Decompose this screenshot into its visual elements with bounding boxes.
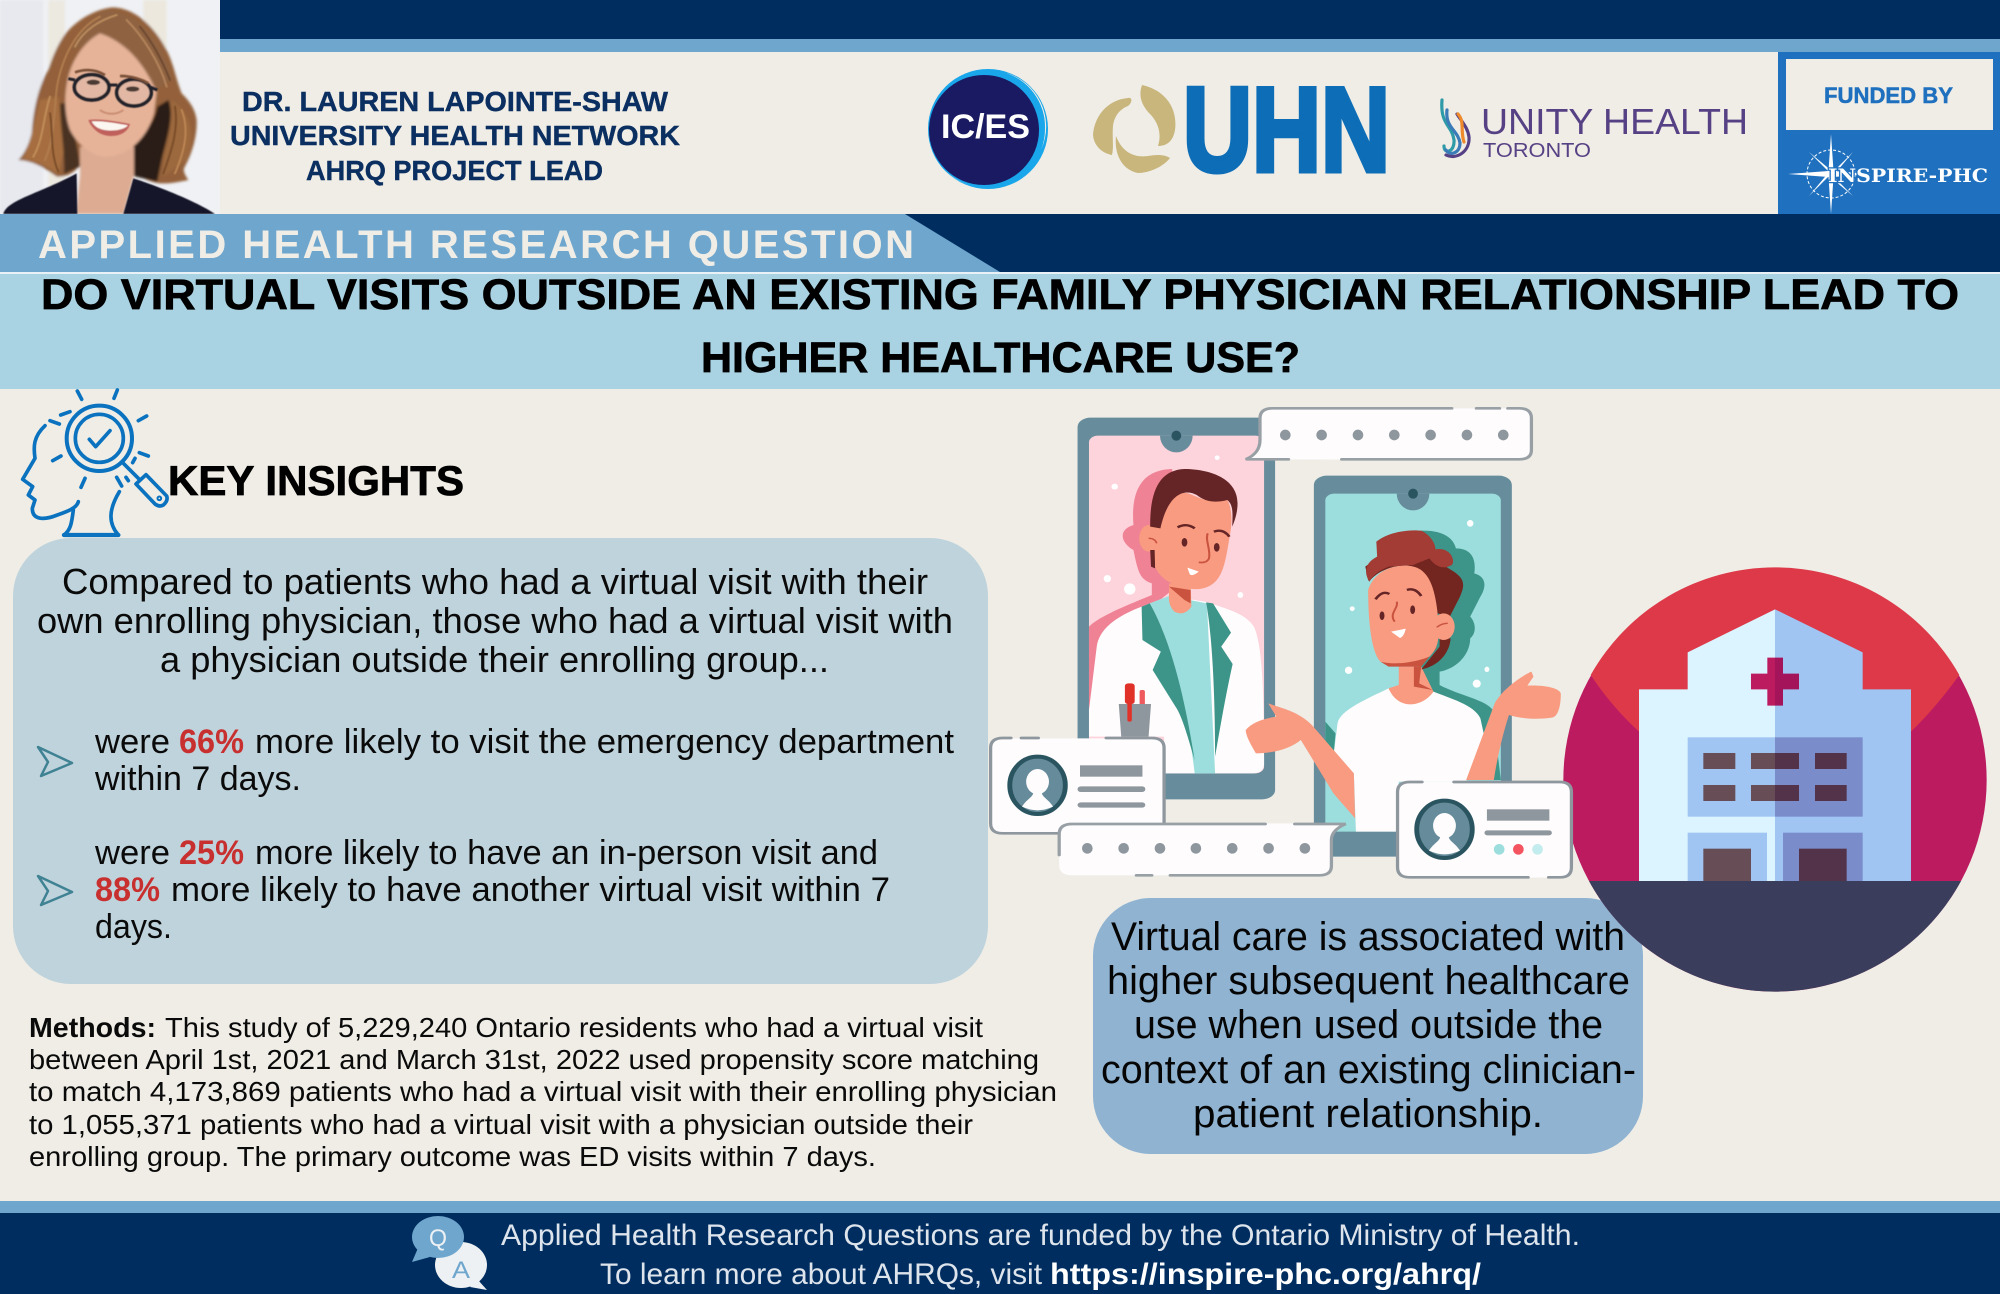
bullet: emergency department: within 7 days. (94, 760, 301, 798)
text block: methods: to match 4,173,869 patients who had a virtual visit with their enrolling physician (29, 1076, 1057, 1107)
panel: funded by INSPIRE-PHC: FUNDED BY (1824, 83, 1953, 108)
bullet: in-person and virtual visits (94, 834, 890, 946)
icon: head with magnifying glass (23, 390, 167, 535)
callout text: virtual care conclusion: higher subsequent healthcare (1107, 959, 1630, 1003)
text block: methods: Methods: (29, 1012, 156, 1043)
id card: patient (1398, 782, 1571, 878)
logo: IC/ES: IC/ES (941, 108, 1030, 146)
bullet: in-person and virtual visits: 25% (179, 834, 244, 872)
bullet: in-person and virtual visits: more likely to have another virtual visit within 7 (171, 871, 890, 909)
logo: UHN: UHN (1183, 63, 1390, 197)
callout text: virtual care conclusion: context of an existing clinician- (1101, 1048, 1636, 1092)
intro paragraph: Compared to patients who had a virtual visit with their (62, 561, 928, 602)
callout text: virtual care conclusion: use when used outside the (1134, 1003, 1603, 1047)
phone: doctor (1078, 418, 1275, 799)
callout text: virtual care conclusion: Virtual care is associated with (1111, 915, 1625, 959)
icon: arrow bullet 1 (38, 747, 72, 776)
intro paragraph: own enrolling physician, those who had a virtual visit with (37, 600, 953, 641)
heading: key insights: KEY INSIGHTS (168, 457, 464, 504)
patient (1246, 530, 1561, 832)
header bands (220, 0, 2000, 52)
footer bands (0, 1201, 2000, 1294)
phone: patient (1314, 476, 1512, 857)
icon: hospital (1563, 567, 1987, 992)
bullet: in-person and virtual visits: more likely to have an in-person visit and (255, 834, 878, 872)
illustration: virtual visit between doctor and patient (991, 408, 1571, 878)
text block: methods: enrolling group. The primary outcome was ED visits within 7 days. (29, 1141, 876, 1172)
bullet: emergency department: were (94, 723, 170, 761)
panel: funded by INSPIRE-PHC: INSPIRE-PHC (1828, 165, 1988, 187)
text block: methods: to 1,055,371 patients who had a virtual visit with a physician outside their (29, 1109, 973, 1140)
title: research question: HIGHER HEALTHCARE USE? (701, 334, 1300, 382)
banner: applied health research question (0, 214, 2000, 272)
presenter name and role (230, 86, 680, 186)
presenter name and role: AHRQ PROJECT LEAD (306, 155, 603, 186)
title: research question: DO VIRTUAL VISITS OUTSIDE AN EXISTING FAMILY PHYSICIAN RELATIONSHIP LEAD TO (41, 271, 1959, 319)
footer text (501, 1219, 1580, 1291)
id card: doctor (991, 738, 1164, 833)
footer text: To learn more about AHRQs, visit (600, 1258, 1043, 1291)
callout text: virtual care conclusion: patient relationship. (1193, 1092, 1543, 1136)
doctor (1089, 469, 1264, 773)
bullet: emergency department: more likely to visit the emergency department (255, 723, 954, 761)
presenter name and role: DR. LAUREN LAPOINTE-SHAW (242, 86, 669, 117)
speech bubble: bottom (1059, 823, 1346, 875)
footer text: https://inspire-phc.org/ahrq/ (1050, 1258, 1482, 1291)
logo: Unity Health Toronto (1442, 100, 1748, 162)
presenter name and role: UNIVERSITY HEALTH NETWORK (230, 120, 680, 151)
logo: IC/ES (928, 69, 1048, 189)
bullet: in-person and virtual visits: were (94, 834, 170, 872)
bullet: in-person and virtual visits: 88% (95, 871, 160, 909)
panel: funded by INSPIRE-PHC (1778, 52, 2000, 214)
icon: Q and A speech bubbles: Q (429, 1225, 447, 1252)
title: research question (0, 271, 2000, 389)
pen cup (1119, 683, 1151, 737)
text block: methods: This study of 5,229,240 Ontario residents who had a virtual visit (165, 1012, 983, 1043)
panel: key insights text (13, 538, 988, 984)
callout background (1093, 898, 1643, 1154)
logo: UHN (1093, 63, 1390, 197)
bullet: emergency department: 66% (179, 723, 244, 761)
text block: methods (29, 1012, 1057, 1172)
bullet: emergency department (94, 723, 954, 798)
portrait photo of Dr. Lapointe-Shaw (0, 0, 220, 214)
icon: arrow bullet 2 (38, 876, 72, 905)
logo: Unity Health Toronto: TORONTO (1483, 140, 1591, 162)
intro paragraph: a physician outside their enrolling group... (160, 639, 829, 680)
bullet: in-person and virtual visits: days. (95, 908, 172, 946)
icon: Q and A speech bubbles (412, 1216, 487, 1290)
banner: applied health research question: APPLIED HEALTH RESEARCH QUESTION (38, 223, 914, 267)
speech bubble: top (1246, 408, 1531, 460)
intro paragraph (37, 561, 953, 680)
text block: methods: between April 1st, 2021 and March 31st, 2022 used propensity score matching (29, 1044, 1039, 1075)
footer text: Applied Health Research Questions are funded by the Ontario Ministry of Health. (501, 1219, 1580, 1252)
logo: Unity Health Toronto: UNITY HEALTH (1481, 101, 1748, 142)
icon: Q and A speech bubbles: A (452, 1257, 470, 1284)
callout text: virtual care conclusion (1101, 915, 1636, 1136)
